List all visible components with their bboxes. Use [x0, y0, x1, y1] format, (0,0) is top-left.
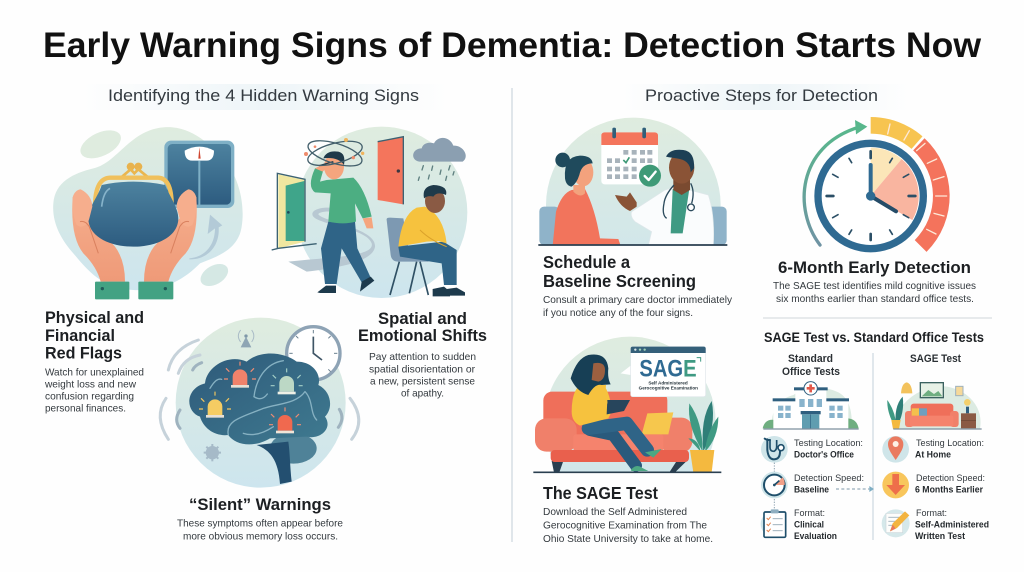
text: baseline description	[543, 295, 733, 319]
text: silent warnings description: more obvious memory loss occurs.	[183, 532, 338, 542]
heading: schedule baseline screening: Baseline Screening	[543, 271, 696, 291]
text: detection speed six months earlier	[915, 473, 985, 494]
icon: patient and doctor with calendar	[538, 118, 728, 246]
text: detection speed baseline: Baseline	[794, 484, 829, 494]
text: format clinical evaluation: Clinical	[794, 520, 824, 530]
column: standard office tests criteria	[761, 436, 874, 541]
panel: schedule a baseline screening	[538, 118, 733, 319]
text: testing location doctor's office: Testing Location:	[794, 438, 863, 448]
text: format self-administered written test: Written Test	[915, 531, 965, 541]
column heading: standard office tests	[782, 353, 840, 378]
text: format clinical evaluation: Evaluation	[794, 531, 837, 541]
icon: living room	[887, 382, 982, 429]
heading: schedule baseline screening	[543, 252, 696, 291]
icon: location pin	[882, 436, 909, 463]
column: SAGE test criteria	[882, 436, 989, 541]
panel: silent warnings	[160, 318, 359, 542]
icon: woman on sofa with SAGE card: Gerocognitive Examination	[639, 385, 698, 391]
icon: paper and pencil	[882, 509, 910, 537]
text: spatial description: spatial disorientation or	[369, 364, 476, 376]
heading: physical and financial red flags	[45, 309, 144, 362]
text: testing location at home: Testing Location:	[916, 438, 984, 448]
text: 6-month description	[773, 281, 976, 305]
column heading: SAGE test: SAGE Test	[910, 353, 961, 365]
heading: spatial and emotional shifts: Emotional Shifts	[358, 327, 487, 345]
text: detection speed six months earlier: 6 Months Earlier	[915, 484, 983, 494]
heading: the SAGE test: The SAGE Test	[543, 483, 658, 503]
title: Early Warning Signs of Dementia: Detection Starts Now	[43, 25, 981, 65]
icon: stopwatch	[761, 472, 788, 508]
text: format self-administered written test	[915, 508, 989, 541]
text: spatial description: Pay attention to sudden	[369, 352, 476, 363]
panel: the SAGE test	[533, 337, 721, 545]
panel: physical and financial red flags	[44, 125, 243, 414]
icon: down arrow	[882, 472, 909, 498]
text: format clinical evaluation	[794, 508, 837, 541]
text: detection speed baseline	[794, 473, 864, 494]
text: detection speed baseline: Detection Speed:	[794, 473, 864, 483]
icon: dizzy man, doors and seated man under rain cloud	[272, 127, 467, 298]
icon: woman on sofa with SAGE card	[533, 336, 722, 474]
text: physical description: weight loss and new	[44, 380, 137, 390]
arrow: baseline to six months earlier	[836, 486, 874, 492]
text: baseline description: if you notice any of the four signs.	[543, 308, 693, 319]
panel: spatial and emotional shifts	[272, 127, 487, 399]
heading: comparison: SAGE Test vs. Standard Office Tests	[764, 329, 984, 345]
icon: stethoscope	[761, 436, 788, 472]
heading: physical and financial red flags: Red Flags	[45, 344, 122, 362]
icon: hands holding purse with weighing scale	[53, 125, 243, 299]
text: SAGE test description	[543, 507, 713, 545]
text: baseline description: Consult a primary care doctor immediately	[543, 295, 733, 306]
text: format clinical evaluation: Format:	[794, 508, 825, 518]
text: spatial description	[369, 352, 476, 400]
icon: brain with alarm lights and clock	[160, 318, 359, 488]
text: physical description	[44, 368, 144, 414]
text: silent warnings description	[177, 518, 343, 542]
text: silent warnings description: These symptoms often appear before	[177, 518, 343, 530]
text: physical description: personal finances.	[45, 404, 126, 414]
text: SAGE test description: Download the Self Administered	[543, 507, 687, 518]
section heading band: left	[80, 84, 450, 110]
text: testing location doctor's office: Doctor's Office	[794, 450, 854, 460]
icon: clipboard	[761, 509, 786, 537]
section heading: proactive steps: Proactive Steps for Detection	[645, 86, 878, 105]
section heading: hidden warning signs: Identifying the 4 Hidden Warning Signs	[108, 86, 419, 105]
text: spatial description: a new, persistent sense	[370, 376, 475, 388]
text: testing location doctor's office	[794, 438, 863, 460]
text: detection speed six months earlier: Detection Speed:	[916, 473, 985, 483]
heading: 6-month early detection: 6-Month Early Detection	[778, 258, 971, 277]
icon: hospital building	[763, 382, 859, 429]
text: spatial description: of apathy.	[401, 388, 444, 400]
heading: physical and financial red flags: Financial	[45, 327, 115, 345]
text: 6-month description: The SAGE test identifies mild cognitive issues	[773, 281, 976, 292]
column heading: standard office tests: Office Tests	[782, 366, 840, 378]
column heading: standard office tests: Standard	[788, 353, 833, 365]
panel: 6-month early detection	[773, 117, 976, 305]
icon: woman on sofa with SAGE card: SAGE	[639, 356, 697, 383]
icon: woman on sofa with SAGE card: Self Administered	[648, 380, 688, 386]
heading: silent warnings: “Silent” Warnings	[189, 496, 331, 514]
heading: spatial and emotional shifts	[358, 310, 487, 345]
heading: schedule baseline screening: Schedule a	[543, 252, 630, 272]
icon: clock with progress arc	[804, 117, 950, 252]
text: testing location at home: At Home	[915, 450, 951, 460]
text: physical description: Watch for unexplained	[45, 368, 144, 378]
text: 6-month description: six months earlier than standard office tests.	[776, 294, 974, 305]
text: SAGE test description: Gerocognitive Examination from The	[543, 520, 707, 532]
text: format self-administered written test: Format:	[916, 508, 947, 518]
section heading band: right	[620, 84, 910, 110]
text: testing location at home	[915, 438, 984, 460]
text: physical description: confusion regarding	[45, 392, 134, 402]
panel: SAGE vs standard comparison	[761, 329, 989, 541]
text: format self-administered written test: Self-Administered	[915, 520, 989, 530]
heading: physical and financial red flags: Physical and	[45, 309, 144, 327]
text: SAGE test description: Ohio State University to take at home.	[543, 534, 713, 545]
heading: spatial and emotional shifts: Spatial and	[378, 310, 467, 328]
